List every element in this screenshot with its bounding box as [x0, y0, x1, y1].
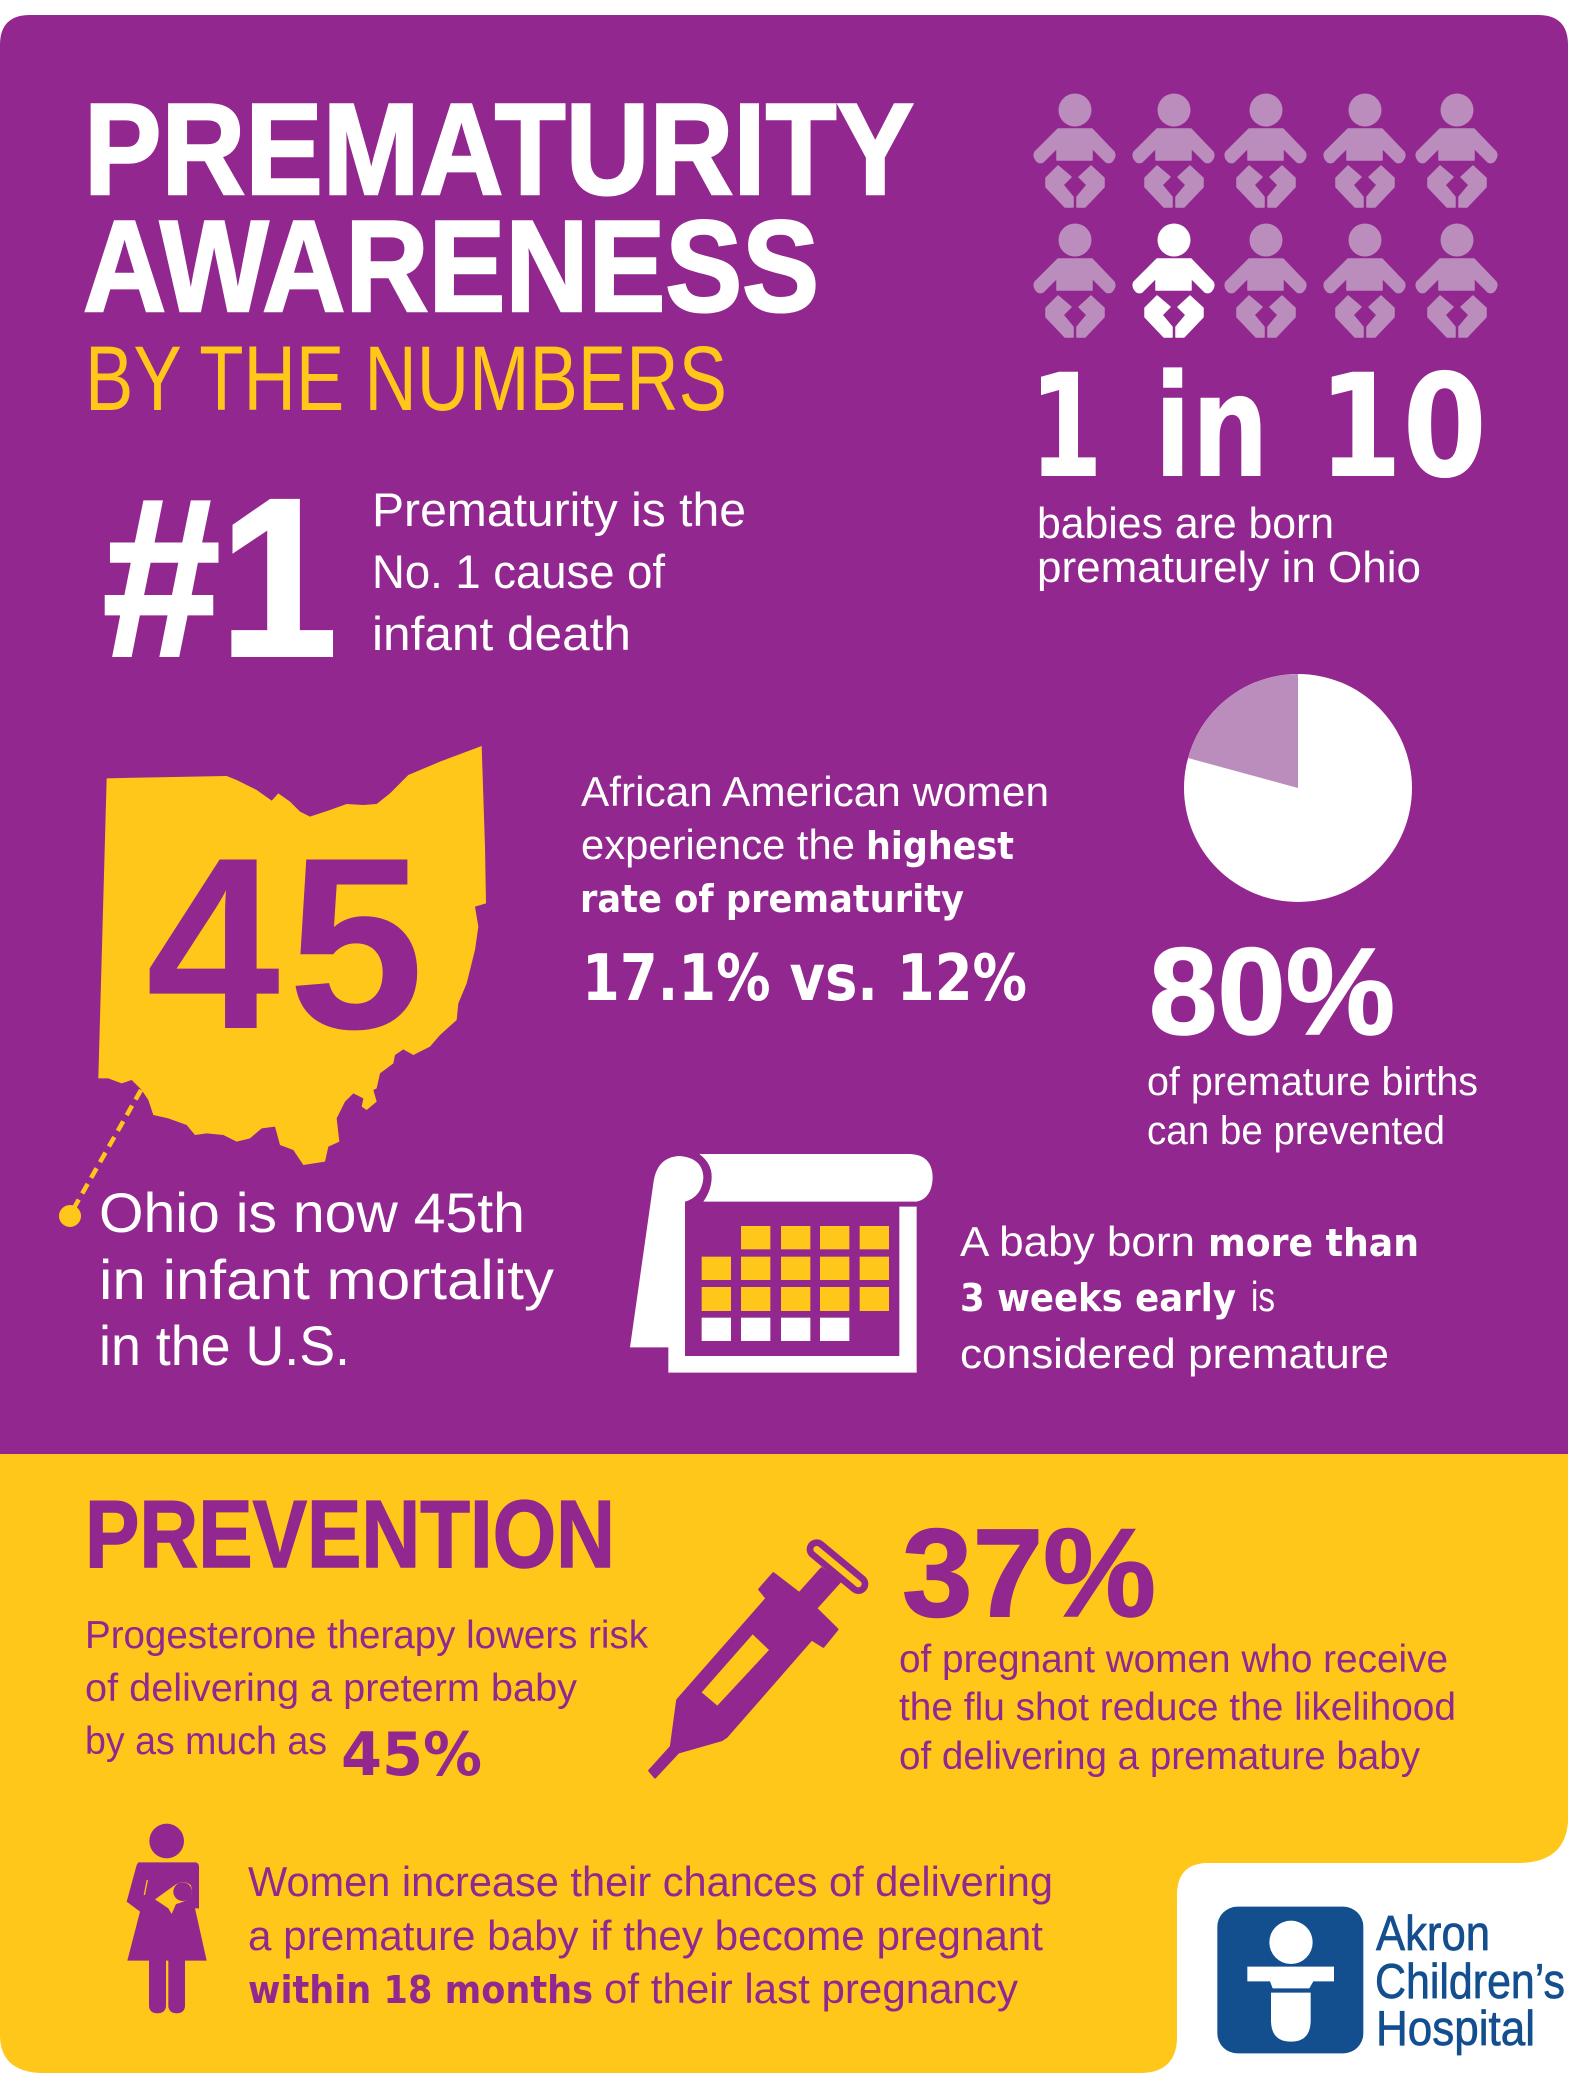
icon: Ohio map with 45	[98, 746, 486, 1165]
panel: purple statistics background	[0, 15, 1568, 1456]
statistic: 1 in 10: babies are born	[1037, 499, 1334, 548]
text block: within 18 months	[248, 1858, 1053, 2012]
logo: Akron Children's Hospital: Akron	[1376, 1907, 1490, 1961]
statistic: 80 percent: of premature births	[1147, 1060, 1478, 1104]
logo: Akron Children's Hospital	[1217, 1907, 1565, 2056]
icon: Ohio map with 45: 4	[146, 806, 280, 1080]
statistic: 1 in 10: prematurely in Ohio	[1037, 543, 1421, 592]
text block: within 18 months: within 18 months	[248, 1968, 593, 2012]
statistic: 37 percent flu shot: of pregnant women who receive	[899, 1638, 1448, 1681]
title: BY THE NUMBERS	[85, 328, 727, 430]
text block: three weeks early: A baby born	[960, 1218, 1195, 1265]
text block: within 18 months: of their last pregnancy	[604, 1965, 1018, 2012]
statistic: 1 in 10	[1029, 343, 1487, 592]
pie chart: 80 percent preventable	[1184, 674, 1412, 902]
panel: yellow prevention background	[0, 1454, 1568, 2073]
statistic: 1 in 10: 1	[1029, 343, 1103, 510]
statistic: 80 percent: can be prevented	[1147, 1109, 1445, 1153]
statistic: 37 percent flu shot: of delivering a premature baby	[899, 1735, 1420, 1778]
statistic: 37 percent flu shot: the flu shot reduce the likelihood	[899, 1686, 1456, 1729]
text block: African American women: African American women	[581, 768, 1049, 815]
caption: Ohio ranking	[99, 1181, 554, 1377]
text block: African American women: highest	[866, 824, 1014, 868]
caption: Ohio ranking: in infant mortality	[99, 1248, 554, 1311]
statistic: 37 percent flu shot: 37%	[902, 1504, 1156, 1643]
title	[83, 76, 914, 430]
title: PREMATURITY	[84, 76, 914, 222]
logo: Akron Children's Hospital: Hospital	[1376, 2002, 1535, 2056]
statistic: number one cause: No. 1 cause of	[372, 545, 666, 598]
text block: progesterone therapy: 45%	[341, 1720, 482, 1790]
icon: Ohio map with 45: 5	[288, 806, 424, 1080]
statistic: 1 in 10: 10	[1318, 343, 1487, 510]
icon: calendar	[630, 1154, 933, 1373]
text block: progesterone therapy: Progesterone therapy lowers risk	[85, 1614, 648, 1657]
text block: three weeks early: 3 weeks early	[960, 1276, 1236, 1320]
text block: progesterone therapy: by as much as	[85, 1720, 327, 1763]
title: AWARENESS	[83, 193, 819, 339]
statistic: number one cause: infant death	[372, 607, 631, 660]
statistic: number one cause: #1	[103, 453, 337, 703]
icon: syringe	[649, 1549, 858, 1777]
statistic: number one cause	[103, 453, 746, 703]
text block: progesterone therapy: of delivering a preterm baby	[85, 1667, 577, 1710]
text block: three weeks early: more than	[1208, 1221, 1419, 1265]
text block: three weeks early: is	[1251, 1273, 1275, 1320]
icon: grid of ten babies, one highlighted	[1034, 94, 1497, 337]
caption: Ohio ranking: in the U.S.	[99, 1314, 350, 1377]
statistic: 80 percent: 80%	[1149, 924, 1395, 1061]
statistic: number one cause: Prematurity is the	[372, 483, 746, 536]
text block: African American women	[580, 768, 1049, 1016]
statistic: 1 in 10: in	[1154, 343, 1269, 510]
text block: three weeks early: considered premature	[960, 1330, 1389, 1377]
dotted leader line from Ohio to caption	[59, 1090, 141, 1227]
text block: African American women: 17.1% vs. 12%	[582, 942, 1027, 1016]
statistic: 37 percent flu shot	[899, 1504, 1456, 1778]
text block: African American women: experience the	[581, 821, 855, 868]
text block: African American women: rate of prematurity	[580, 877, 964, 921]
statistic: 80 percent	[1147, 924, 1478, 1153]
text block: within 18 months: Women increase their chances of delivering	[248, 1858, 1053, 1905]
caption: Ohio ranking: Ohio is now 45th	[99, 1181, 525, 1244]
text block: three weeks early	[960, 1218, 1419, 1377]
icon: woman holding baby	[127, 1824, 207, 2013]
heading: prevention: PREVENTION	[85, 1481, 615, 1588]
text block: progesterone therapy	[85, 1614, 648, 1790]
text block: within 18 months: a premature baby if they become pregnant	[248, 1912, 1043, 1959]
